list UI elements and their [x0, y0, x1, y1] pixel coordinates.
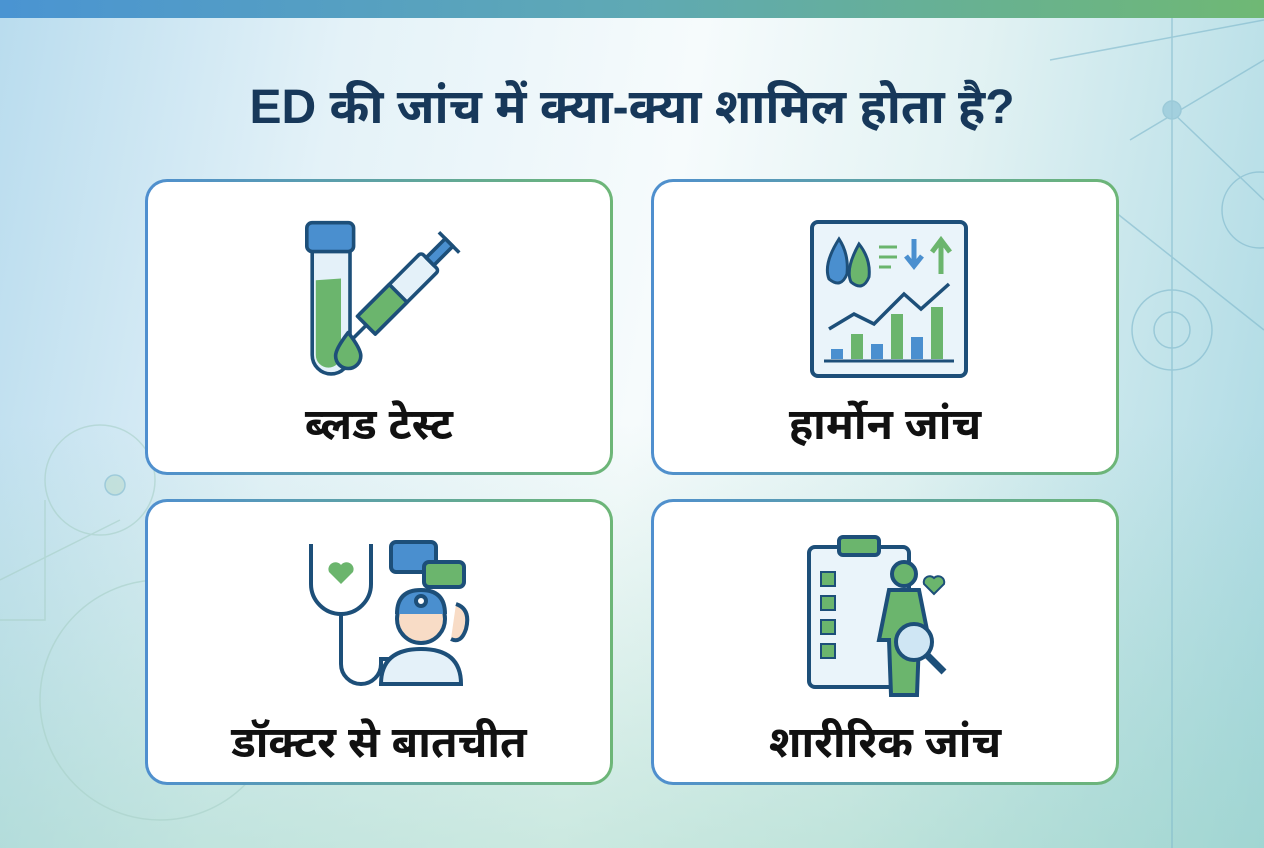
panel: physical exam: [651, 499, 1119, 785]
label: हार्मोन जांच: [789, 401, 981, 449]
icon: clipboard and body: [807, 535, 946, 697]
panel: doctor consultation: [145, 499, 613, 785]
title: ED की जांच में क्या-क्या शामिल होता है?: [249, 81, 1015, 134]
top bar: [0, 0, 1264, 18]
label: ब्लड टेस्ट: [305, 401, 453, 449]
icon: test tube and syringe: [305, 220, 460, 376]
panel: blood test: [145, 179, 613, 475]
label: शारीरिक जांच: [769, 719, 1001, 767]
icon: stethoscope and doctor: [309, 540, 470, 686]
icon: hormone chart: [810, 220, 968, 378]
panel: hormone test: [651, 179, 1119, 475]
label: डॉक्टर से बातचीत: [231, 719, 527, 767]
